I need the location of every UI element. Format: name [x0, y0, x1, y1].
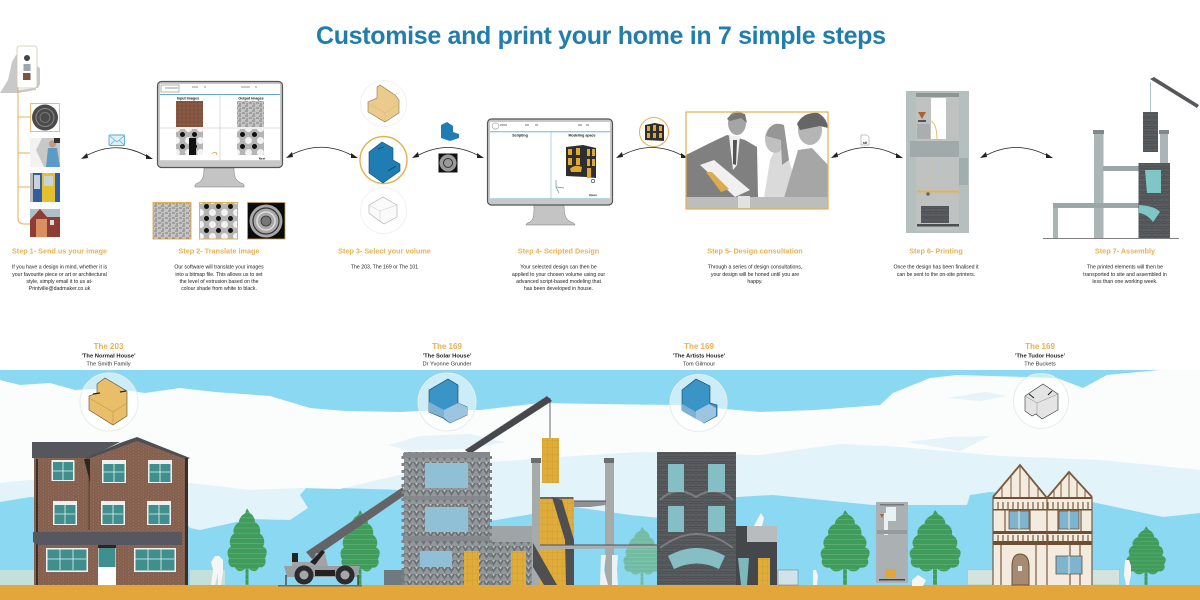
step 4 text: Your selected design can then be [520, 264, 597, 270]
tree 4 [821, 510, 870, 585]
step 6 text: can be sent to the on-site printers. [897, 272, 975, 278]
caption: The Artists House: The 169 [684, 342, 714, 351]
caption: The Tudor House: The 169 [1025, 342, 1055, 351]
caption: The 203: The Smith Family [86, 362, 131, 368]
step 6 heading: Step 6- Printing [909, 246, 963, 256]
monitor: input and output images: Input Images [177, 96, 199, 100]
title: Customise and print your home in 7 simple steps [316, 22, 886, 50]
caption: The 203: The 203 [94, 342, 124, 351]
step 3: volumes [338, 80, 431, 270]
ground [0, 585, 1200, 600]
step 7 heading: Step 7- Assembly [1095, 246, 1155, 256]
street scene [0, 370, 1200, 600]
house: the tudor house [968, 465, 1120, 585]
tree 1 [228, 508, 267, 585]
step 3 heading: Step 3- Select your volume [338, 246, 431, 256]
step 5 text: Through a series of design consultations, [708, 264, 802, 270]
image: mandala bitmap [248, 202, 285, 239]
icon: 203 volume badge [80, 373, 138, 431]
tree 6 [1127, 526, 1166, 585]
arrow: step 2 to 3 [286, 147, 358, 158]
step 4 text: has been developed in house. [524, 286, 593, 292]
step 1 text: Printville@dadmaker.co.uk [29, 286, 91, 292]
step 2 text: colour shade from white to black. [181, 286, 257, 292]
step 5 text: happy. [747, 279, 763, 285]
caption: The 203 [82, 342, 136, 368]
icon: artists house volume badge [670, 374, 727, 432]
icon: 169 blue volume selected [360, 136, 407, 184]
illustration: on-site printer [906, 91, 969, 233]
white cloud layer [0, 370, 1200, 490]
arrow: step 3 to 4 [412, 148, 484, 158]
tree 3 pale [623, 527, 661, 585]
icon: 101 outline volume [360, 188, 406, 234]
illustration: crane assembling house [1043, 77, 1199, 238]
step 1 text: If you have a design in mind, whether it is [12, 264, 107, 270]
step 4: scripted design [488, 119, 612, 292]
icon: envelope [109, 135, 124, 146]
step 6: printing [893, 91, 979, 278]
icon: small blue volume [441, 122, 459, 141]
caption: The Solar House: Dr Yvonne Grunder [423, 362, 472, 368]
step 4 text [512, 264, 605, 292]
monitor: scripting and modeling space: Scripting [512, 134, 528, 138]
arrow: step 1 to 2 [81, 148, 153, 159]
house captions [82, 342, 1066, 368]
step 2 text: into a bitmap file. This allows us to set [175, 272, 263, 278]
step 2 text [174, 264, 264, 292]
step 4 text: advanced script-based modeling that [516, 279, 601, 285]
icon: design thumbnail [640, 118, 668, 146]
step 4 heading: Step 4- Scripted Design [518, 246, 599, 256]
arrow: step 5 to 6 [831, 148, 903, 158]
arrow: step 6 to 7 [980, 148, 1053, 158]
step 7: assembly [1043, 77, 1199, 285]
thumbnail: red house [30, 209, 60, 237]
monitor: scripting and modeling space: Modeling space [569, 134, 595, 138]
image: pattern bitmap [200, 202, 238, 239]
step 4 text: applied to your chosen volume using our [512, 272, 605, 278]
tree 2 [341, 510, 380, 585]
small cloud wisps [388, 392, 1007, 451]
step 7 text: less than one working week. [1092, 279, 1158, 285]
step 5 text [708, 264, 802, 285]
house: the normal house [32, 437, 190, 585]
monitor: input and output images: Output Images [238, 96, 264, 100]
icon: small mandala [438, 154, 458, 172]
caption: The Tudor House [1015, 342, 1066, 368]
step 7 text: transported to site and assembled in [1083, 272, 1167, 278]
step 2 text: the level of extrusion based on the [179, 279, 259, 285]
step 6 text [893, 264, 979, 278]
icon: 203 gold volume [360, 80, 406, 126]
step 2 heading: Step 2- Translate image [178, 246, 260, 256]
thumbnail: round mosaic [30, 104, 60, 132]
thumbnail: yellow door [30, 173, 60, 202]
tree 5 [910, 510, 961, 585]
icon: stl file [861, 135, 869, 145]
caption: The Tudor House: The Buckets [1024, 362, 1056, 368]
step 6 text: Once the design has been finalised it [893, 264, 979, 270]
house: the artists house [657, 452, 798, 585]
step 7 text: The printed elements will then be [1087, 264, 1163, 270]
caption: The Solar House [423, 342, 472, 368]
caption: The Artists House: 'The Artists House' [673, 354, 726, 360]
step 1: send image [0, 46, 107, 292]
icon: hand holding phone [0, 46, 40, 93]
house: the solar house [384, 398, 660, 585]
step 5: consultation [686, 111, 828, 285]
caption: The 203: 'The Normal House' [82, 354, 136, 360]
step 1 text [12, 264, 107, 292]
caption: The Solar House: The 169 [432, 342, 462, 351]
step 5 text: your design will be honed until you are [711, 272, 799, 278]
monitor: scripting and modeling space: Open [589, 193, 597, 197]
vehicle: telehandler crane [278, 396, 552, 586]
step 3 text: The 203, The 169 or The 101 [351, 264, 418, 270]
caption: The Tudor House: 'The Tudor House' [1015, 354, 1066, 360]
people figures [211, 513, 1131, 586]
thumbnail: plaster and man [30, 138, 60, 167]
step 7 text [1083, 264, 1167, 285]
low walls [0, 570, 225, 585]
small printer [876, 502, 908, 583]
icon: tudor house volume badge [1014, 374, 1068, 428]
monitor: scripting and modeling space [488, 119, 612, 225]
image: brick bitmap [153, 202, 191, 239]
step 2: translate [153, 82, 285, 292]
step 5 heading: Step 5- Design consultation [707, 246, 803, 256]
photo: design consultation [686, 111, 828, 209]
arrow: step 4 to 5 [616, 148, 688, 158]
monitor: input and output images [158, 82, 282, 187]
step 1 heading: Step 1- Send us your image [12, 246, 107, 256]
icon: solar house volume badge [418, 373, 476, 431]
step 1 text: your favourite piece or art or architectural [12, 272, 107, 278]
icon: stl file: stl [863, 141, 867, 145]
caption: The Artists House: Tom Gilmour [683, 362, 715, 368]
caption: The Solar House: 'The Solar House' [423, 354, 472, 360]
sky [0, 370, 1200, 586]
caption: The Artists House [673, 342, 726, 368]
connector line [18, 88, 30, 224]
step 2 text: Our software will translate your images [174, 264, 264, 270]
monitor: input and output images: Next [259, 156, 265, 160]
step 1 text: style, simply email it to us at- [26, 279, 93, 285]
pale cloud layer [0, 440, 1200, 530]
